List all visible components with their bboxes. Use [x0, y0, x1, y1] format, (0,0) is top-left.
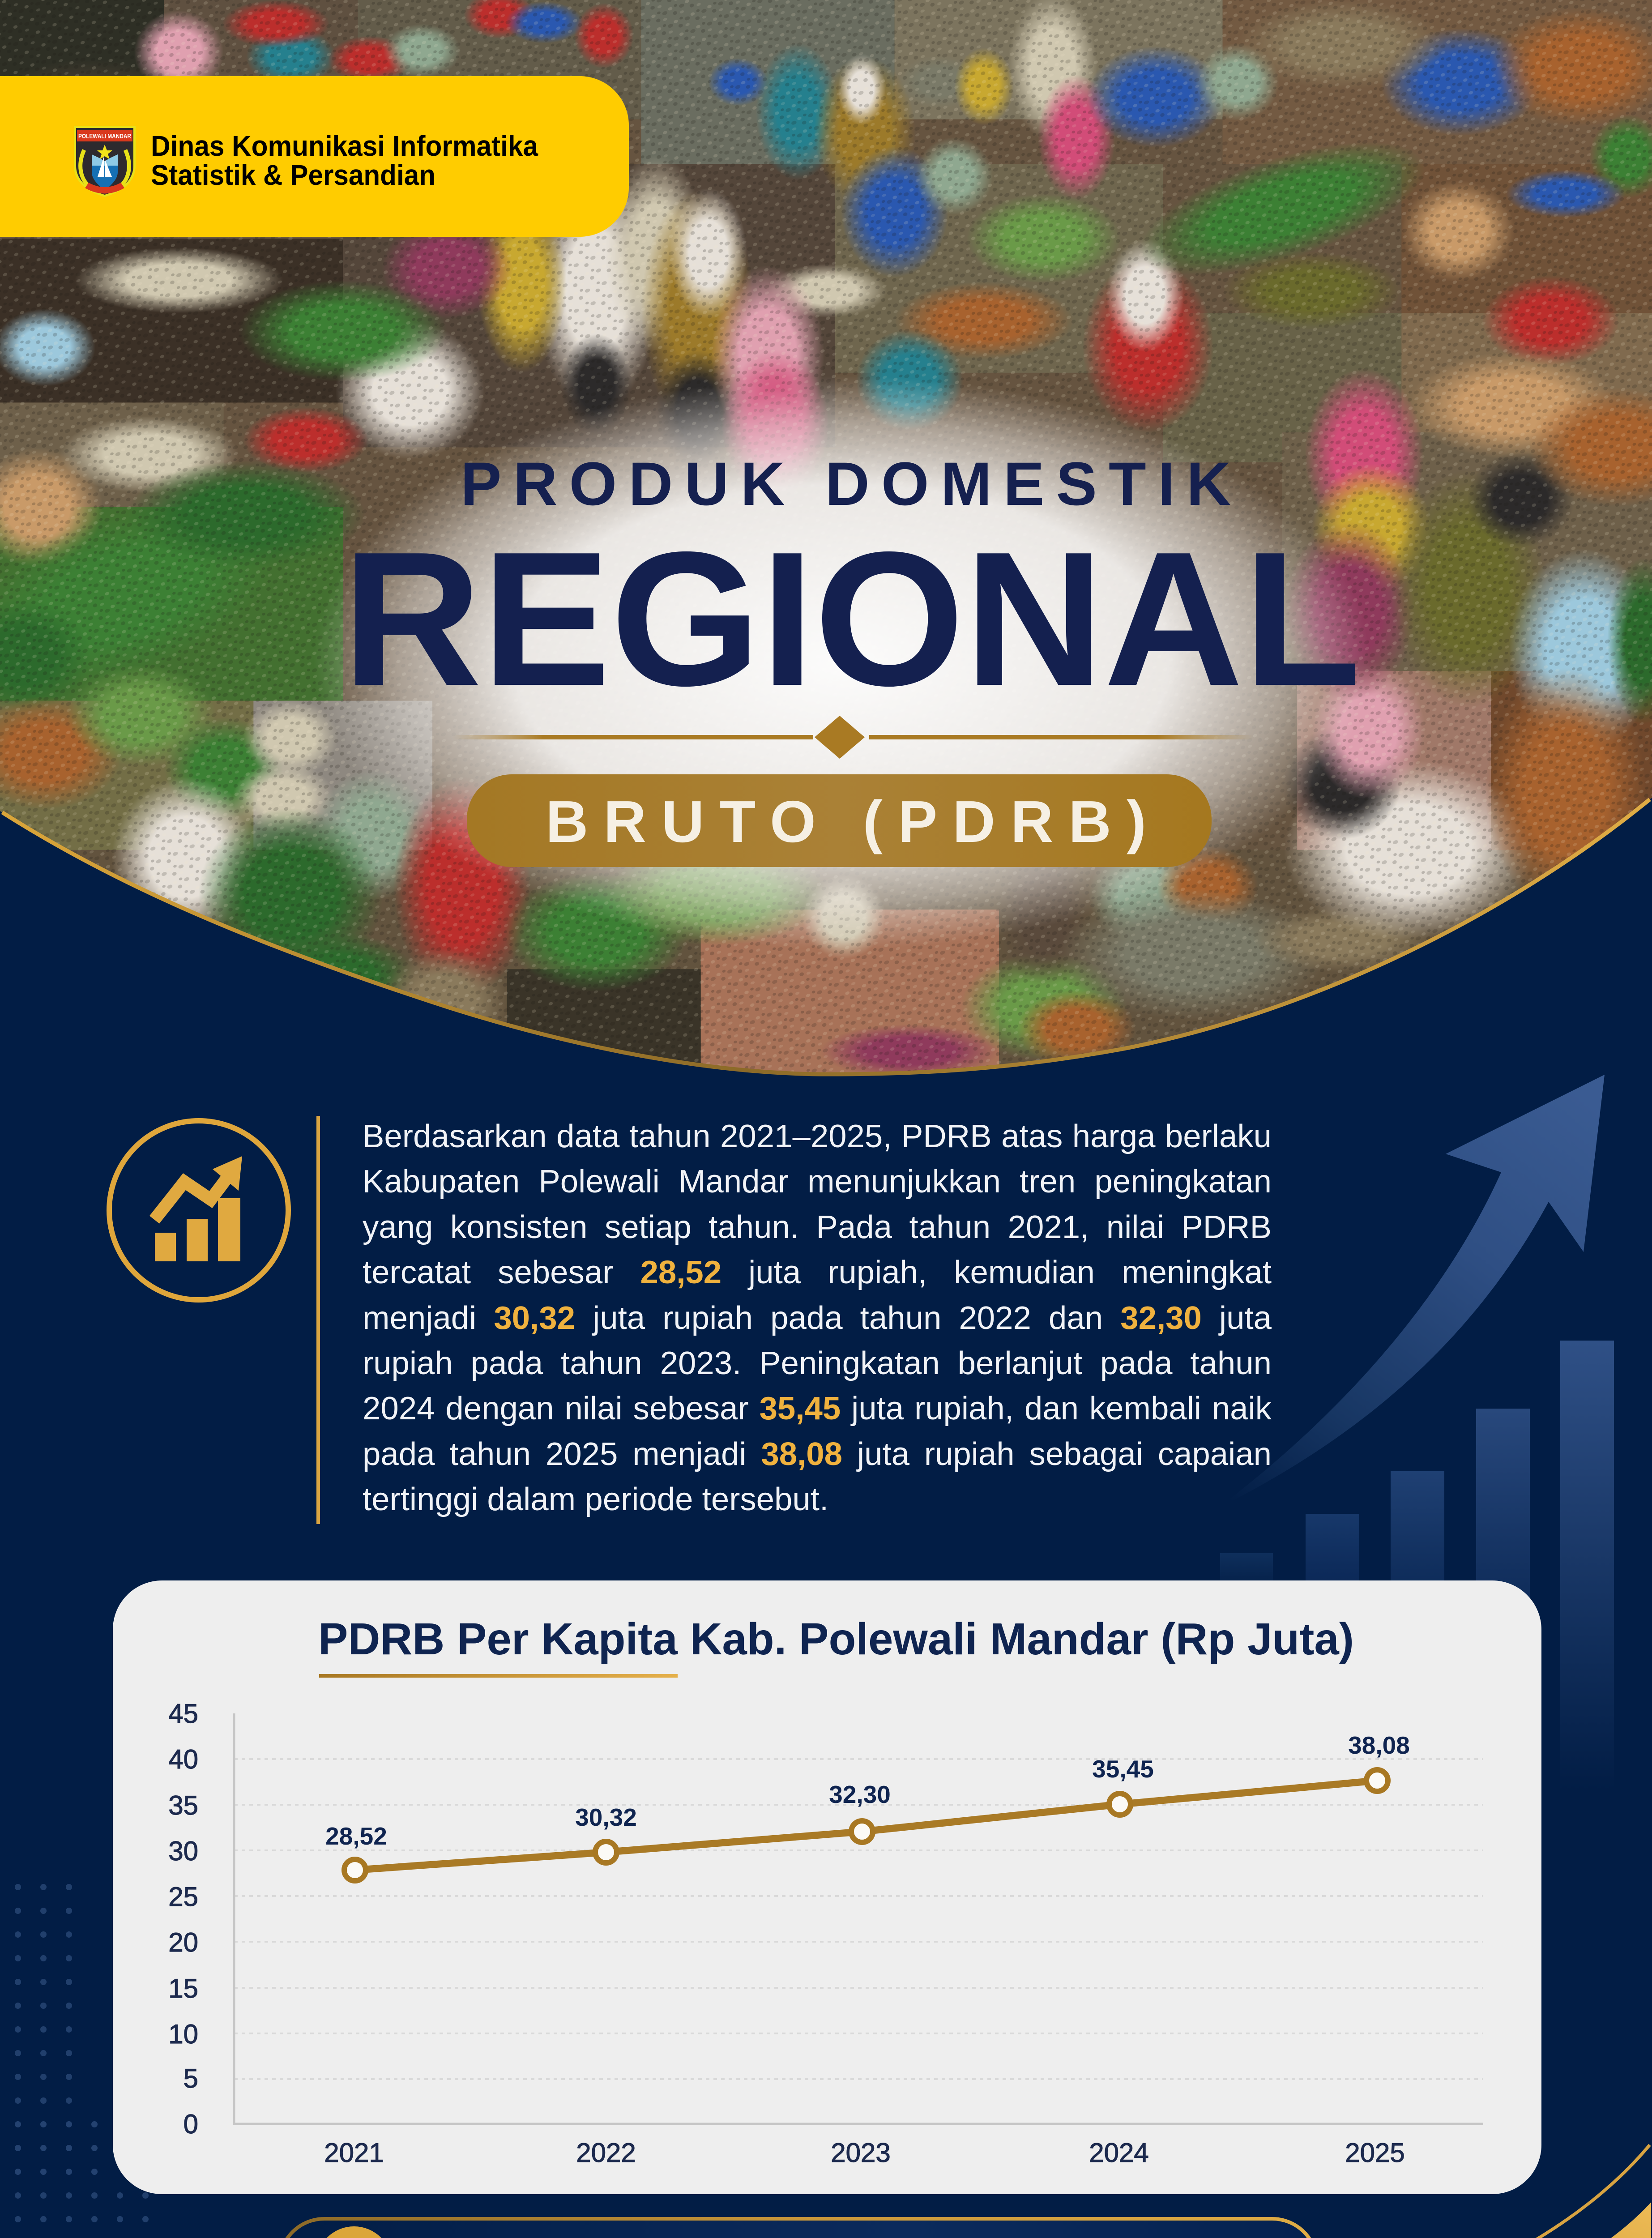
gridlines: [234, 1759, 1483, 2079]
title: [342, 450, 1361, 726]
decorative dot pattern: [5, 1875, 260, 2238]
agency name: Dinas Komunikasi Informatika: [151, 130, 538, 162]
title line: produk domestik: PRODUK DOMESTIK: [461, 450, 1231, 518]
chart title: PDRB Per Kapita Kab. Polewali Mandar (Rp Juta): [318, 1614, 1354, 1664]
y axis labels: 45: [168, 1699, 198, 1729]
y axis labels: 20: [168, 1927, 198, 1957]
x axis labels: 2024: [1089, 2138, 1149, 2168]
x axis labels: 2022: [576, 2138, 636, 2168]
agency name: Statistik & Persandian: [151, 159, 435, 191]
busy market texture: [0, 0, 1652, 1083]
data labels: 35,45: [1092, 1755, 1154, 1783]
y axis labels: 10: [168, 2019, 198, 2049]
vertical accent rule: [316, 1116, 320, 1524]
chart panel: [113, 1580, 1541, 2194]
y axis labels: 5: [184, 2063, 198, 2093]
corner decoration: gold swoosh: [1307, 2145, 1651, 2238]
soft colour masses: [0, 0, 164, 76]
icon: growth chart in circle: [109, 1121, 288, 1300]
subtitle pill: BRUTO (PDRB): [546, 789, 1146, 854]
background rising bars: [1220, 1341, 1614, 1833]
market photo hero: [0, 0, 1652, 1148]
body paragraph: Berdasarkan data tahun 2021–2025, PDRB atas harga berlaku: [363, 1118, 1272, 1154]
y axis labels: 40: [168, 1744, 198, 1774]
chart title underline: [319, 1674, 678, 1678]
subtitle pill: [467, 774, 1212, 867]
logo: Polewali Mandar crest: [74, 126, 136, 197]
y axis labels: 30: [168, 1836, 198, 1866]
white mist behind title: [313, 376, 1370, 949]
line chart: [168, 1699, 1483, 2168]
y axis labels: 35: [168, 1790, 198, 1820]
x axis labels: 2023: [831, 2138, 891, 2168]
body paragraph: menjadi 30,32 juta rupiah pada tahun 2022 dan 32,30 juta: [363, 1300, 1272, 1336]
axes: [234, 1713, 1483, 2124]
body paragraph: pada tahun 2025 menjadi 38,08 juta rupiah sebagai capaian: [363, 1436, 1272, 1472]
background arrow: [1217, 1075, 1605, 1508]
title line: regional: REGIONAL: [342, 512, 1361, 726]
data labels: 30,32: [575, 1803, 637, 1831]
body paragraph: Kabupaten Polewali Mandar menunjukkan tren peningkatan: [363, 1163, 1272, 1200]
x axis labels: 2025: [1345, 2138, 1405, 2168]
data labels: 38,08: [1348, 1731, 1410, 1759]
source bar: [279, 2219, 1317, 2238]
header banner: [0, 76, 629, 237]
ornament divider with diamond: [453, 716, 1254, 759]
gold hero curve: [2, 799, 1650, 1074]
icon: location pin: [316, 2226, 392, 2238]
y axis labels: 15: [168, 1973, 198, 2003]
body paragraph: yang konsisten setiap tahun. Pada tahun 2021, nilai PDRB: [363, 1209, 1272, 1245]
data points: [344, 1770, 1388, 1881]
body paragraph: rupiah pada tahun 2023. Peningkatan berlanjut pada tahun: [363, 1345, 1272, 1381]
data labels: 32,30: [829, 1781, 891, 1808]
blended blobs: [37, 68, 141, 76]
data labels: [325, 1731, 1410, 1850]
data line: [355, 1781, 1377, 1870]
body paragraph: tercatat sebesar 28,52 juta rupiah, kemudian meningkat: [363, 1254, 1272, 1290]
body paragraph: tertinggi dalam periode tersebut.: [363, 1481, 828, 1517]
x axis labels: 2021: [324, 2138, 384, 2168]
body paragraph: 2024 dengan nilai sebesar 35,45 juta rupiah, dan kembali naik: [363, 1390, 1272, 1427]
agency name: [151, 130, 538, 191]
y axis labels: [168, 1699, 198, 2139]
y axis labels: 25: [168, 1882, 198, 1912]
x axis labels: [324, 2138, 1405, 2168]
logo: Polewali Mandar crest: POLEWALI MANDAR: [78, 132, 131, 140]
body paragraph: [363, 1114, 1272, 1522]
y axis labels: 0: [184, 2109, 198, 2139]
data labels: 28,52: [325, 1822, 387, 1850]
